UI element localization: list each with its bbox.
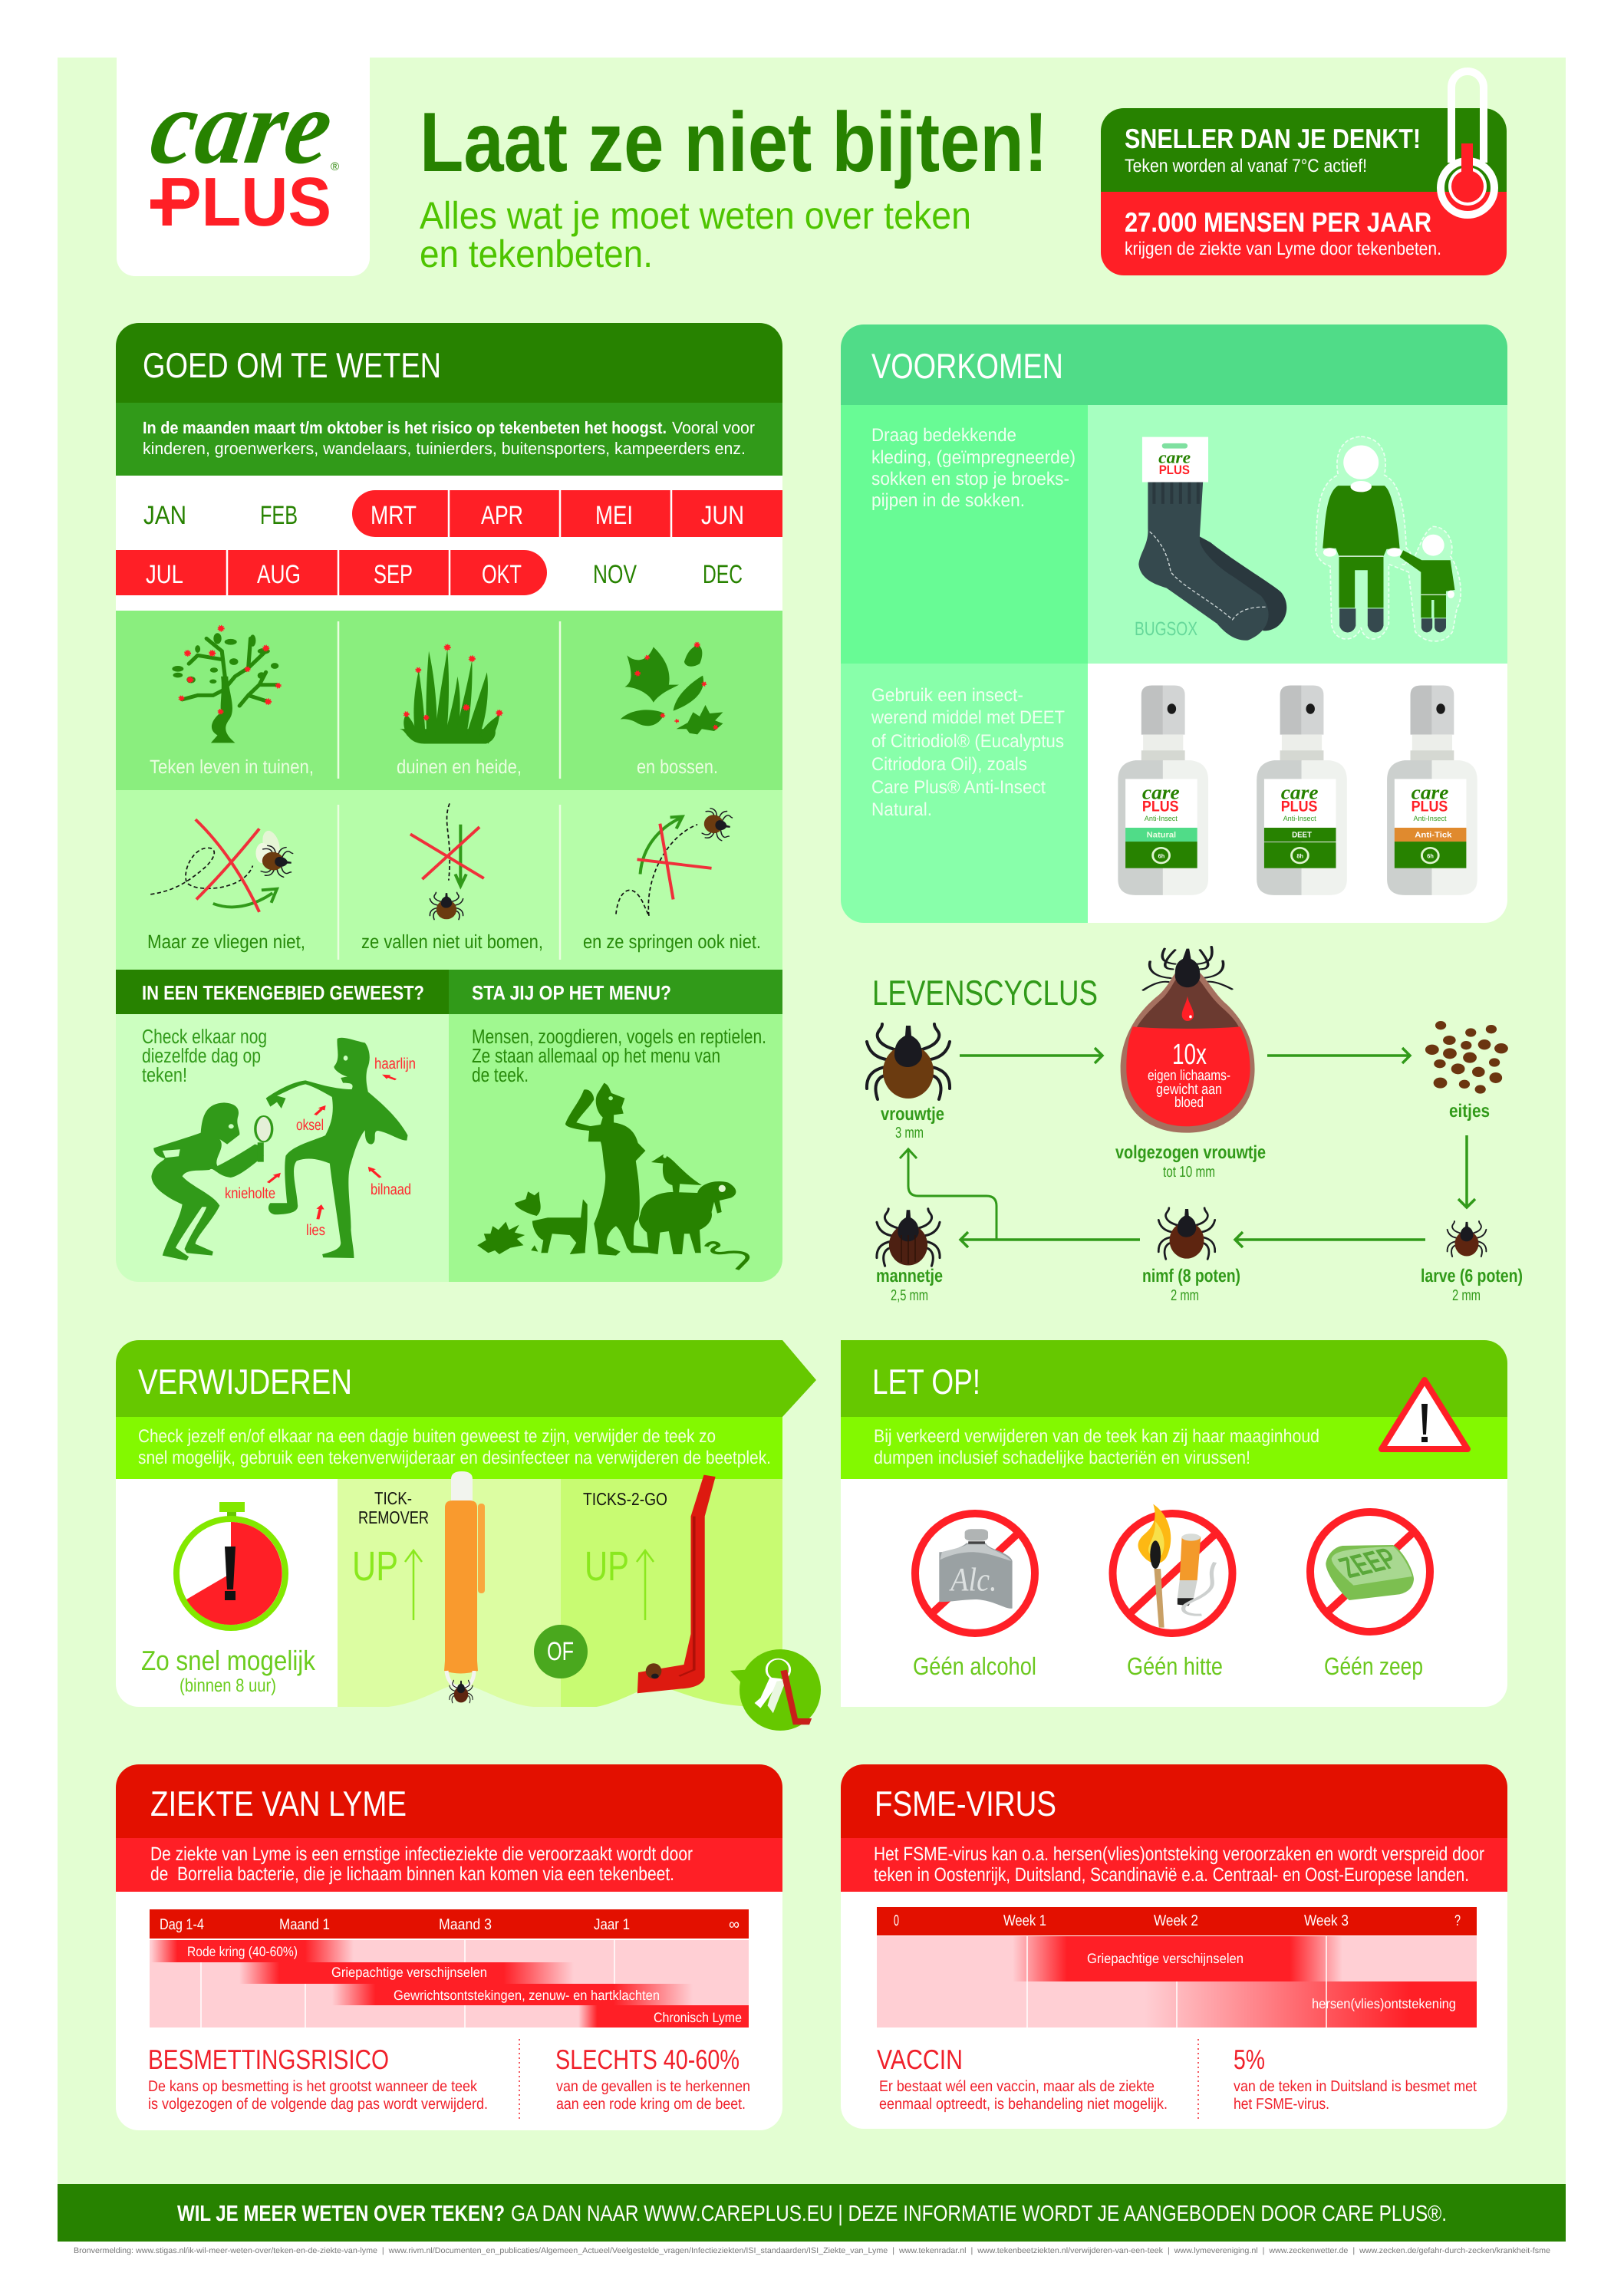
icon: spray bottle natural: Natural [1147, 831, 1176, 839]
text block: clothing advice: kleding, (geïmpregneerde) [871, 447, 1076, 468]
labels: prohibited methods: Géén zeep [1324, 1652, 1423, 1680]
labels: life stages: larve (6 poten) [1421, 1266, 1523, 1286]
icon: spray bottle natural: 6h [1158, 853, 1164, 859]
label: up arrow two: UP [585, 1543, 629, 1589]
icon: thermometer [1441, 71, 1494, 215]
text block: on the menu [472, 1025, 766, 1086]
text block: risk intro: kinderen, groenwerkers, wandelaars, tuinierders, buitensporters, kampeerders enz. [143, 439, 746, 458]
icon: ticks do not fly [150, 819, 293, 912]
labels: life stage sizes: 2 mm [1452, 1287, 1481, 1304]
chart: month calendar: MEI [595, 501, 633, 530]
chart: month calendar: NOV [593, 560, 637, 589]
text block: infection risk: BESMETTINGSRISICO [148, 2044, 389, 2075]
panel: goed om te weten [116, 323, 782, 1282]
icon: spray bottle anti-tick: Anti-Tick [1415, 831, 1452, 839]
icon: spray bottle anti-tick [1387, 686, 1477, 895]
text block: check each other: teken! [142, 1063, 187, 1086]
text block: only 40-60 percent: van de gevallen is te herkennen [556, 2078, 750, 2095]
text block: repellent advice: Care Plus® Anti-Insect [871, 777, 1046, 798]
icon: bugsox sock with tag [1138, 437, 1286, 641]
icon: grass with ticks [399, 645, 502, 743]
icon: spray bottle natural: PLUS [1142, 798, 1179, 815]
text block: fsme intro [874, 1843, 1484, 1886]
text block: repellent advice: of Citriodiol® (Eucalyptus [871, 731, 1064, 752]
heading: LEVENSCYCLUS [872, 973, 1098, 1013]
caption row: how ticks do not move: en ze springen ook niet. [583, 931, 761, 953]
heading: VOORKOMEN [871, 346, 1063, 386]
labels: life stages: mannetje [876, 1266, 943, 1286]
chart: fsme timeline: ? [1454, 1912, 1461, 1929]
text block: repellent advice: werend middel met DEET [871, 707, 1065, 728]
icon: eggs [1425, 1021, 1508, 1094]
panel: fsme-virus [841, 1764, 1507, 2129]
heading: on the menu: STA JIJ OP HET MENU? [472, 981, 671, 1004]
icon: spray bottle anti-tick: Anti-Insect [1414, 815, 1447, 822]
labels: life stages: nimf (8 poten) [1142, 1266, 1240, 1286]
labels: life stages [876, 1101, 1523, 1286]
footer banner: GA DAN NAAR WWW.CAREPLUS.EU | DEZE INFORMATIE WORDT JE AANGEBODEN DOOR CARE PLUS®. [511, 2202, 1447, 2226]
chart: fsme timeline: Week 3 [1304, 1912, 1349, 1929]
logo panel [117, 58, 370, 276]
text block: risk intro: Vooral voor [672, 418, 755, 437]
chart: fsme timeline: Week 2 [1154, 1912, 1198, 1929]
labels: life stages: volgezogen vrouwtje [1115, 1142, 1266, 1163]
icon: leaves with ticks [621, 643, 723, 734]
icon: nymph tick [1158, 1208, 1215, 1259]
title: Laat ze niet bijten! [420, 95, 1048, 189]
labels: life stage sizes: 2 mm [1171, 1287, 1199, 1304]
text block: removal advice: snel mogelijk, gebruik een tekenverwijderaar en desinfecteer na verwijderen de beetplek. [138, 1448, 771, 1468]
labels: body parts to check: lies [306, 1222, 325, 1239]
text block: vaccine: Er bestaat wél een vaccin, maar als de ziekte [879, 2078, 1155, 2095]
labels: life stage sizes [891, 1125, 1481, 1304]
text block: clothing advice [871, 425, 1076, 511]
text block: clothing advice: Draag bedekkende [871, 425, 1016, 446]
caption row: where ticks live: duinen en heide, [397, 756, 522, 778]
panel: verwijderen [116, 1340, 821, 1731]
text block: vaccine [877, 2044, 1168, 2113]
text block: as soon as possible: (binnen 8 uur) [180, 1675, 276, 1696]
text block: repellent advice: Citriodora Oil), zoals [871, 754, 1027, 775]
caption row: how ticks do not move: ze vallen niet uit bomen, [361, 931, 543, 953]
text block: on the menu: de teek. [472, 1063, 529, 1086]
icon: bugsox sock with tag: PLUS [1159, 463, 1190, 477]
chart: month calendar: DEC [703, 560, 743, 589]
text block: warning: dumpen inclusief schadelijke bacteriën en virussen! [874, 1448, 1250, 1468]
labels: life stage sizes: tot 10 mm [1163, 1164, 1215, 1181]
text block: lyme intro: De ziekte van Lyme is een ernstige infectieziekte die veroorzaakt wordt door [150, 1843, 693, 1865]
icon: stopwatch [176, 1502, 285, 1628]
text block: only 40-60 percent: SLECHTS 40-60% [555, 2044, 740, 2075]
labels: prohibited methods: Géén hitte [1127, 1652, 1223, 1680]
callout: facts box: 27.000 MENSEN PER JAAR [1125, 206, 1431, 238]
chart: month calendar: JUL [146, 560, 183, 589]
text block: removal advice: Check jezelf en/of elkaar na een dagje buiten geweest te zijn, verwijder de teek zo [138, 1426, 716, 1447]
icon: female tick [867, 1024, 950, 1099]
labels: life stages: vrouwtje [881, 1104, 944, 1125]
label: up arrow one [352, 1543, 422, 1620]
icon: male tick [877, 1209, 940, 1266]
icon: engorged female tick: bloed [1174, 1095, 1204, 1111]
text block: vaccine: eenmaal optreedt, is behandeling niet mogelijk. [879, 2096, 1168, 2113]
icon: silhouettes checking for ticks [151, 1038, 407, 1260]
icon: adult and child in covering clothes [1316, 436, 1461, 641]
text block: check each other [142, 1025, 267, 1086]
chart: lyme timeline: Maand 1 [279, 1916, 330, 1933]
icon: engorged female tick: gewicht aan [1156, 1082, 1222, 1098]
icon: spray bottle natural: Anti-Insect [1145, 815, 1178, 822]
icon: spray bottle deet: 8h [1296, 853, 1303, 859]
chart: month calendar: MRT [371, 501, 417, 530]
label: tick-remover: REMOVER [358, 1507, 429, 1527]
text block: infection risk [148, 2044, 488, 2113]
icon: engorged female tick: 10x [1172, 1039, 1207, 1071]
footer banner [58, 2184, 1566, 2242]
heading: LET OP! [872, 1362, 980, 1402]
text block: fsme intro: teken in Oostenrijk, Duitsland, Scandinavië e.a. Centraal- en Oost-Europese landen. [874, 1864, 1469, 1886]
text block: risk intro: In de maanden maart t/m oktober is het risico op tekenbeten het hoogst. [143, 418, 667, 437]
chart: fsme timeline: hersen(vlies)ontstekening [1312, 1996, 1456, 2011]
logo panel: care [143, 68, 341, 186]
labels: body parts to check: haarlijn [374, 1056, 416, 1072]
label: or: OF [547, 1637, 574, 1666]
callout: facts box: SNELLER DAN JE DENKT! [1125, 123, 1421, 154]
chart: lyme timeline: Gewrichtsontstekingen, zenuw- en hartklachten [394, 1988, 660, 2003]
text block: five percent [1234, 2044, 1477, 2113]
icon: larva tick [1448, 1221, 1486, 1257]
text block: risk intro [143, 418, 755, 458]
subtitle: en tekenbeten. [420, 232, 653, 275]
text block: vaccine: VACCIN [877, 2044, 963, 2075]
text block: clothing advice: sokken en stop je broeks- [871, 469, 1069, 489]
icon: warning triangle [1382, 1380, 1468, 1449]
icon: spray bottle deet: PLUS [1281, 798, 1317, 815]
icon: spray bottle deet [1257, 686, 1347, 895]
callout: facts box [1101, 108, 1507, 275]
chart: month calendar: AUG [257, 560, 301, 589]
heading: ZIEKTE VAN LYME [150, 1784, 407, 1823]
labels: life stages: eitjes [1449, 1101, 1490, 1122]
chart: month calendar: SEP [374, 560, 413, 589]
text block: as soon as possible: Zo snel mogelijk [141, 1645, 316, 1676]
icon: engorged female tick [1121, 947, 1255, 1133]
chart: lyme timeline: Maand 3 [439, 1916, 492, 1933]
icon: spray bottle anti-tick: care [1412, 781, 1448, 803]
chart: lyme timeline: Rode kring (40-60%) [187, 1944, 298, 1959]
sources line: Bronvermelding: www.stigas.nl/ik-wil-meer-weten-over/teken-en-de-ziekte-van-lyme | www.rivm.nl/Documenten_en_publicaties/Algemeen_Actueel/Veelgestelde_vragen/Infectieziekten/ISI_standaarden/ISI_Ziekte_van_Lyme | www.tekenradar.nl | www.tekenbeetziekten.nl/verwijderen-van-een-teek | www.lymevereniging.nl | www.zeckenwetter.de | www.zecken.de/gefahr-durch-zecken/krankheit-fsme [74, 2246, 1550, 2255]
icon: ticks do not fall from trees [410, 803, 484, 920]
text block: repellent advice: Natural. [871, 799, 932, 820]
text block: infection risk: is volgezogen of de volgende dag pas wordt verwijderd. [148, 2096, 488, 2113]
label: up arrow two [585, 1543, 654, 1620]
icon: spray bottle natural: care [1142, 781, 1180, 803]
caption row: where ticks live: Teken leven in tuinen, [150, 756, 314, 778]
text block: clothing advice: pijpen in de sokken. [871, 490, 1025, 511]
chart: fsme timeline: Week 1 [1003, 1912, 1046, 1929]
chart: month calendar: JAN [143, 501, 186, 530]
chart: month calendar [116, 490, 782, 595]
icon: ticks do not jump [616, 808, 733, 916]
label: up arrow one: UP [352, 1543, 398, 1589]
chart: lyme timeline: Dag 1-4 [160, 1916, 204, 1933]
labels: life stage sizes: 2,5 mm [891, 1287, 928, 1304]
text block: five percent: van de teken in Duitsland is besmet met [1234, 2078, 1477, 2095]
icon: spray bottle natural [1118, 686, 1208, 895]
label: tick-remover [358, 1488, 429, 1527]
labels: body parts to check: knieholte [225, 1185, 275, 1202]
chart: lyme timeline: Chronisch Lyme [654, 2010, 742, 2025]
callout: facts box: krijgen de ziekte van Lyme door tekenbeten. [1125, 239, 1441, 259]
icon: spray bottle deet: care [1281, 781, 1319, 803]
icon: spray bottle deet: Anti-Insect [1283, 815, 1316, 822]
logo panel: PLUS [158, 164, 331, 241]
panel: ziekte van lyme [116, 1764, 782, 2130]
icon: no alcohol: Alc. [949, 1561, 997, 1598]
panel: voorkomen [841, 324, 1507, 923]
text block: infection risk: De kans op besmetting is het grootst wanneer de teek [148, 2078, 478, 2095]
icon: ticks-2-go tool [637, 1475, 716, 1693]
text block: check each other: diezelfde dag op [142, 1044, 261, 1067]
label: or [534, 1625, 588, 1678]
arrow: life cycle flow [900, 1048, 1475, 1247]
chart: lyme timeline: ∞ [729, 1916, 740, 1933]
text block: repellent advice [871, 685, 1065, 820]
subtitle [420, 194, 971, 275]
text block: only 40-60 percent: aan een rode kring om de beet. [556, 2096, 746, 2113]
logo panel: ® [331, 160, 339, 173]
panel: let op [841, 1340, 1507, 1707]
text block: check each other: Check elkaar nog [142, 1025, 267, 1048]
text block: on the menu: Ze staan allemaal op het menu van [472, 1044, 720, 1067]
caption row: how ticks do not move [147, 931, 761, 953]
text block: only 40-60 percent [555, 2044, 750, 2113]
chart: fsme timeline: Griepachtige verschijnselen [1087, 1951, 1244, 1966]
caption row: where ticks live: en bossen. [637, 756, 718, 778]
heading: GOED OM TE WETEN [143, 345, 441, 385]
chart: fsme timeline [877, 1907, 1477, 2028]
icon: tick remover pen [444, 1471, 485, 1703]
heading: FSME-VIRUS [875, 1784, 1056, 1823]
text block: on the menu: Mensen, zoogdieren, vogels en reptielen. [472, 1025, 766, 1048]
caption row: how ticks do not move: Maar ze vliegen niet, [147, 931, 305, 953]
chart: lyme timeline: Jaar 1 [594, 1916, 630, 1933]
label: tick-remover: TICK- [374, 1488, 412, 1508]
text block: lyme intro: de Borrelia bacterie, die je lichaam binnen kan komen via een tekenbeet. [150, 1863, 674, 1885]
panel: levenscyclus [867, 947, 1523, 1304]
heading: VERWIJDEREN [138, 1362, 352, 1402]
label: bugsox: BUGSOX [1135, 618, 1197, 640]
chart: fsme timeline: 0 [894, 1912, 899, 1929]
caption row: where ticks live [150, 756, 718, 778]
text block: removal advice [138, 1426, 771, 1468]
text block: lyme intro [150, 1843, 693, 1885]
text block: five percent: het FSME-virus. [1234, 2096, 1329, 2113]
icon: person and animals silhouettes [477, 1083, 747, 1270]
icon: tree with ticks [172, 626, 281, 743]
icon: bugsox sock with tag: care [1158, 449, 1191, 467]
footer banner: WIL JE MEER WETEN OVER TEKEN? [177, 2202, 505, 2226]
icon: no heat [1112, 1504, 1232, 1633]
text block: repellent advice: Gebruik een insect- [871, 685, 1023, 706]
chart: lyme timeline [150, 1909, 749, 2028]
chart: month calendar: OKT [482, 560, 522, 589]
chart: lyme timeline: Griepachtige verschijnselen [331, 1965, 487, 1980]
icon: spray bottle anti-tick: 6h [1427, 853, 1434, 859]
labels: prohibited methods [913, 1652, 1423, 1680]
icon: engorged female tick: eigen lichaams- [1148, 1068, 1230, 1084]
icon: no alcohol [915, 1514, 1035, 1633]
chart: month calendar: FEB [260, 501, 298, 530]
chart: month calendar: JUN [701, 501, 744, 530]
icon: no soap: ZEEP [1332, 1542, 1405, 1584]
labels: body parts to check [225, 1056, 416, 1239]
text block: warning: Bij verkeerd verwijderen van de teek kan zij haar maaginhoud [874, 1426, 1319, 1447]
icon: keychain bubble [730, 1649, 821, 1731]
labels: prohibited methods: Géén alcohol [913, 1652, 1036, 1680]
icon: spray bottle deet: DEET [1292, 831, 1312, 839]
labels: body parts to check: oksel [296, 1117, 324, 1134]
icon: spray bottle anti-tick: PLUS [1412, 798, 1448, 815]
icon: no soap [1310, 1512, 1430, 1632]
chart: month calendar: APR [481, 501, 523, 530]
text block: fsme intro: Het FSME-virus kan o.a. hersen(vlies)ontsteking veroorzaken en wordt verspreid door [874, 1843, 1484, 1865]
callout: facts box: Teken worden al vanaf 7°C actief! [1125, 156, 1367, 176]
label: ticks-2-go: TICKS-2-GO [583, 1489, 667, 1509]
text block: as soon as possible [141, 1645, 316, 1696]
text block: warning [874, 1426, 1319, 1468]
subtitle: Alles wat je moet weten over teken [420, 194, 971, 237]
heading: been in tick area: IN EEN TEKENGEBIED GEWEEST? [142, 981, 424, 1004]
labels: body parts to check: bilnaad [371, 1181, 411, 1198]
labels: life stage sizes: 3 mm [895, 1125, 924, 1141]
text block: five percent: 5% [1234, 2044, 1265, 2075]
